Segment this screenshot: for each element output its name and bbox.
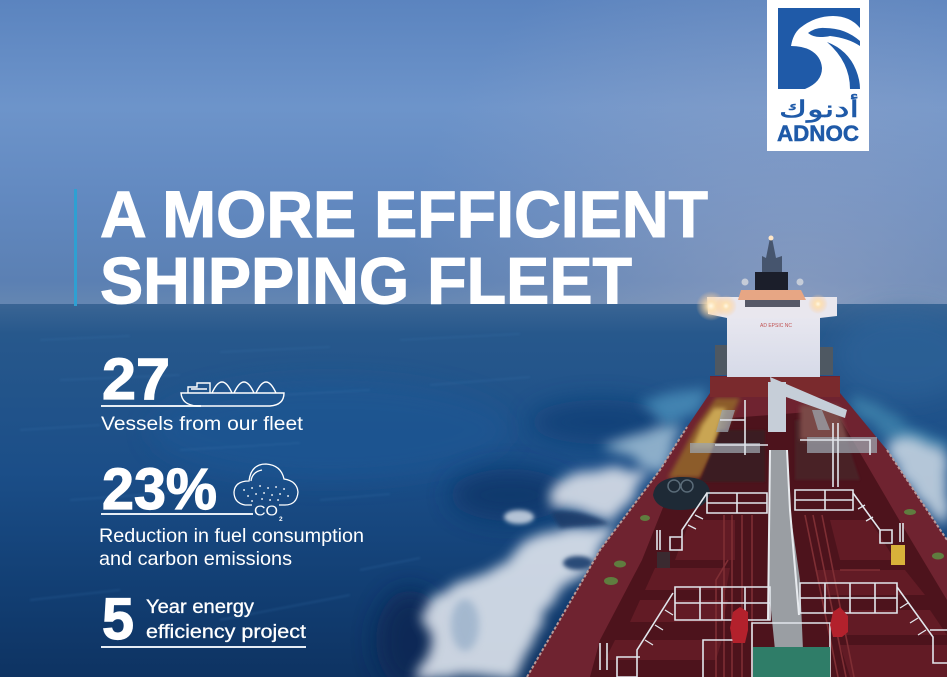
stat: 23 percent: Reduction in fuel consumption (99, 525, 364, 547)
title (100, 177, 708, 318)
stat: 27 vessels (101, 347, 304, 435)
icon: ship (181, 382, 284, 406)
accommodation block: AD EPSIC NC (760, 323, 792, 329)
stat: 5 year project: efficiency project (146, 622, 307, 643)
ship wake (417, 385, 947, 677)
stat: 5 year project (101, 587, 307, 652)
stair treads (645, 505, 926, 645)
icon: CO2 cloud (234, 464, 298, 523)
deck plates (605, 520, 947, 677)
green platform (753, 647, 830, 677)
central catwalk (768, 450, 803, 650)
deck pipes (716, 515, 880, 677)
stat: 5 year project: Year energy (146, 597, 255, 618)
mooring fenders (653, 477, 710, 510)
stat: 27 vessels: Vessels from our fleet (101, 413, 304, 435)
title: SHIPPING FLEET (100, 244, 632, 318)
deck railings (600, 400, 947, 677)
ADNOC logo (767, 0, 869, 151)
accent line (74, 189, 77, 306)
title: A MORE EFFICIENT (100, 177, 708, 251)
english wordmark: ADNOC (777, 121, 859, 146)
hull rails (527, 427, 687, 677)
stat: 5 year project: 5 (102, 587, 134, 652)
stat: 23 percent (99, 457, 364, 570)
lit fore deck (668, 398, 740, 478)
arabic wordmark: أدنوك (779, 94, 859, 123)
hull and deck (527, 376, 947, 677)
stat: 27 vessels: 27 (102, 347, 170, 412)
stat: 23 percent: and carbon emissions (99, 548, 292, 570)
hatch markers (604, 509, 944, 585)
stat: 23 percent: 23% (102, 457, 217, 522)
upper deck machinery (690, 410, 877, 453)
background: sea (0, 304, 947, 677)
red valves (730, 607, 748, 643)
crane (768, 377, 847, 432)
background: sky (0, 0, 947, 306)
accommodation block (696, 236, 840, 397)
icon: falcon head (791, 16, 860, 89)
icon: CO2 cloud: CO (254, 504, 278, 520)
ship (527, 236, 947, 677)
yellow hatch (891, 545, 905, 565)
icon: CO2 cloud: 2 (279, 516, 283, 523)
